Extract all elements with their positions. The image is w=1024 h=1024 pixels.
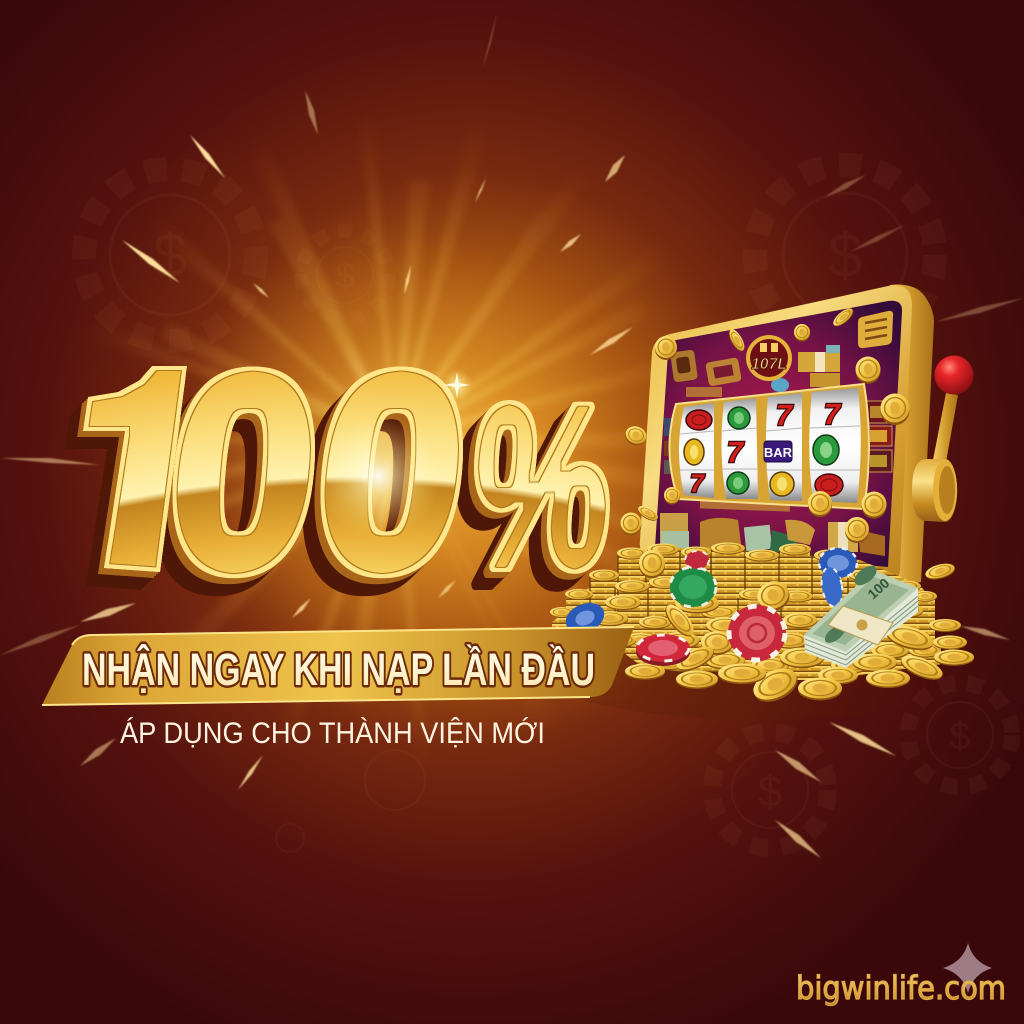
lever red ball (934, 356, 974, 394)
second zero: 0 (306, 318, 478, 625)
headline 100% (56, 314, 621, 633)
digit one (65, 366, 187, 590)
lever (912, 356, 974, 522)
bundle top note (804, 570, 918, 652)
BAR symbol: BAR (764, 445, 793, 460)
menu button (858, 311, 893, 348)
screen decorations (660, 311, 893, 556)
red seven: 7 (690, 470, 705, 498)
sparkle watermark star (943, 943, 992, 993)
warm shadow under the slot machine (520, 600, 1000, 720)
ribbon text: NHẬN NGAY KHI NẠP LẦN ĐẦU (82, 644, 595, 695)
central glow haze (170, 230, 630, 650)
reel row dividers (680, 426, 860, 470)
faint dollar gears: $ (828, 222, 862, 291)
brand logo text: bigwinlife.com (796, 969, 1006, 1007)
machine gold frame (640, 285, 912, 584)
slot machine (640, 285, 974, 590)
machine screen (655, 301, 902, 567)
upper game art (670, 345, 840, 397)
large red chip (728, 605, 786, 661)
green coin symbol (813, 435, 839, 465)
small red chip (685, 551, 709, 569)
paper band (828, 606, 893, 645)
faint dollar gears (84, 165, 1012, 852)
red box symbol (686, 410, 712, 430)
screen logo badge (746, 335, 792, 381)
gold coin symbol (684, 439, 704, 465)
flat red chip (636, 634, 690, 666)
ribbon highlight edges (42, 627, 634, 705)
digit one: 1 (56, 314, 287, 633)
pile base (552, 547, 940, 680)
screen logo badge: 107L (751, 356, 787, 373)
cash bundle (804, 562, 918, 668)
cash and treasure behind coins (660, 513, 885, 556)
green coin symbol (727, 472, 749, 494)
lens flares on headline (316, 369, 473, 538)
bundle edge lines (805, 596, 918, 665)
coin pile (550, 542, 974, 708)
reel frame (669, 384, 869, 509)
faint dollar gears: $ (758, 767, 782, 816)
faint dollar gears: $ (153, 222, 187, 291)
coin stacks (566, 548, 935, 644)
red seven: 7 (824, 399, 842, 431)
tilted blue chip (819, 566, 845, 608)
reel symbols (684, 399, 843, 498)
green coin symbol (728, 407, 750, 429)
bundle thickness (804, 588, 918, 668)
first zero: 0 (158, 318, 330, 625)
coins in the air (620, 305, 956, 582)
red seven: 7 (727, 437, 745, 469)
reels (679, 388, 861, 503)
machine side wall (884, 285, 934, 590)
gold coin symbol (770, 472, 794, 496)
faint dollar gears: $ (335, 255, 355, 296)
faint dollar gears: $ (949, 716, 971, 758)
subheading: ÁP DỤNG CHO THÀNH VIỆN MỚI (120, 717, 545, 750)
gold ribbon (42, 627, 634, 705)
bonus strip (700, 499, 790, 512)
red box symbol (815, 474, 843, 496)
front coins (608, 600, 974, 708)
sunburst rays (0, 41, 795, 839)
ribbon shape (42, 627, 634, 705)
hub opening (933, 459, 957, 521)
right side symbol panels (866, 401, 892, 472)
"100" note figure: 100 (864, 575, 893, 602)
red seven: 7 (776, 400, 794, 432)
percent sign: % (464, 358, 621, 615)
gaps between stacks (590, 550, 888, 640)
blue chip (819, 548, 857, 578)
green chip (670, 567, 716, 607)
stack-top coins (550, 542, 941, 674)
BAR symbol (764, 441, 793, 462)
left side symbol panels (664, 418, 676, 474)
lever shaft (933, 393, 958, 462)
blue chip tucked under ribbon (561, 598, 609, 638)
lever hub (912, 459, 957, 522)
